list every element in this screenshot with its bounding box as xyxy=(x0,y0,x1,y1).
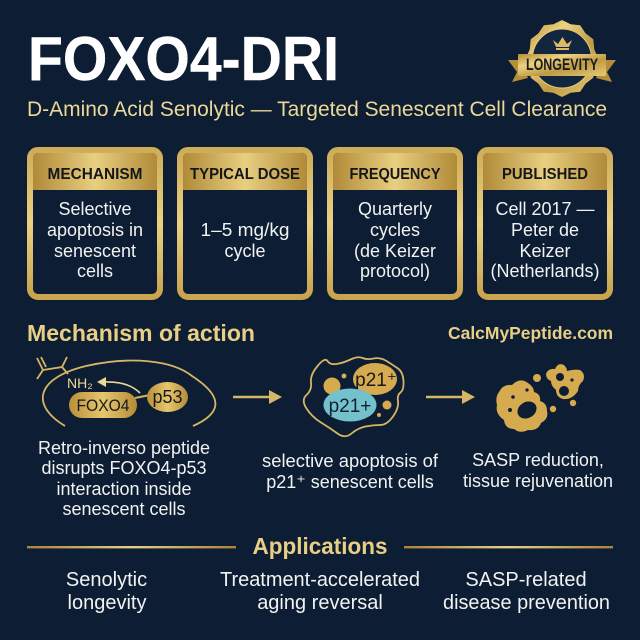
card: mechanism: apoptosis in xyxy=(47,220,143,240)
text: retro-inverso: interaction inside xyxy=(56,479,192,499)
text: retro-inverso: senescent cells xyxy=(62,499,186,519)
card: published: Cell 2017 — xyxy=(495,199,595,219)
card: mechanism: cells xyxy=(77,261,113,281)
diagram: senescent cell: p21+ xyxy=(329,396,371,417)
application: aging reversal xyxy=(220,569,420,614)
text: retro-inverso: Retro-inverso peptide xyxy=(38,438,210,458)
site link: CalcMyPeptide.com xyxy=(448,323,613,343)
application: senolytic longevity: Senolytic xyxy=(66,569,147,591)
text: retro-inverso xyxy=(38,438,210,519)
text: SASP reduction xyxy=(463,450,613,491)
card: typical dose: 1–5 mg/kg xyxy=(200,220,290,240)
text: SASP reduction: SASP reduction, xyxy=(472,450,604,470)
application: disease prevention xyxy=(443,569,610,614)
p53 oval xyxy=(147,382,188,412)
arrow xyxy=(233,390,282,404)
application: aging reversal: Treatment-accelerated xyxy=(220,569,420,591)
card: frequency xyxy=(330,150,460,297)
card: mechanism: Selective xyxy=(58,199,132,219)
application: aging reversal: aging reversal xyxy=(257,592,383,614)
card: published: (Netherlands) xyxy=(490,261,600,281)
card: mechanism: MECHANISM xyxy=(48,166,142,183)
card: typical dose: TYPICAL DOSE xyxy=(190,166,300,183)
diagram: FOXO4-p53: NH₂ xyxy=(67,375,93,391)
card: frequency: Quarterly xyxy=(358,199,432,219)
application: disease prevention: disease prevention xyxy=(443,592,610,614)
card: frequency: FREQUENCY xyxy=(350,166,441,183)
icon: cell debris xyxy=(496,364,584,432)
card: published xyxy=(480,150,610,297)
application: senolytic longevity xyxy=(66,569,147,614)
card: frequency: cycles xyxy=(370,220,420,240)
card: published: PUBLISHED xyxy=(502,166,588,183)
title: FOXO4-DRI xyxy=(28,24,339,94)
card: typical dose: cycle xyxy=(224,241,266,261)
card: frequency: (de Keizer xyxy=(354,241,436,261)
diagram: senescent cell: p21⁺ xyxy=(355,370,397,391)
card: mechanism xyxy=(30,150,160,297)
heading: applications: Applications xyxy=(252,533,388,559)
card: published: Peter de xyxy=(511,220,579,240)
application: disease prevention: SASP-related xyxy=(465,569,587,591)
card: published: Keizer xyxy=(519,241,571,261)
card: mechanism: senescent xyxy=(54,241,136,261)
card: frequency: protocol) xyxy=(360,261,430,281)
diagram: FOXO4-p53 xyxy=(37,357,215,426)
text: selective apoptosis: p21⁺ senescent cells xyxy=(266,472,434,492)
FOXO4 pill xyxy=(69,392,137,418)
text: retro-inverso: disrupts FOXO4-p53 xyxy=(41,458,207,478)
subtitle: D-Amino Acid Senolytic — Targeted Senescent Cell Clearance xyxy=(27,98,607,121)
badge: longevity xyxy=(508,20,616,97)
badge: longevity: LONGEVITY xyxy=(526,56,598,74)
application: senolytic longevity: longevity xyxy=(68,592,146,614)
icon: crown xyxy=(553,37,572,50)
heading: mechanism of action: Mechanism of action xyxy=(27,320,255,346)
text: selective apoptosis: selective apoptosis of xyxy=(262,451,439,471)
text: SASP reduction: tissue rejuvenation xyxy=(463,471,613,491)
diagram: FOXO4-p53: p53 xyxy=(152,387,183,407)
diagram: FOXO4-p53: FOXO4 xyxy=(76,396,130,415)
text: selective apoptosis xyxy=(262,451,439,492)
arrow xyxy=(426,390,475,404)
diagram: senescent cell xyxy=(304,357,404,436)
card: typical dose xyxy=(180,150,310,297)
